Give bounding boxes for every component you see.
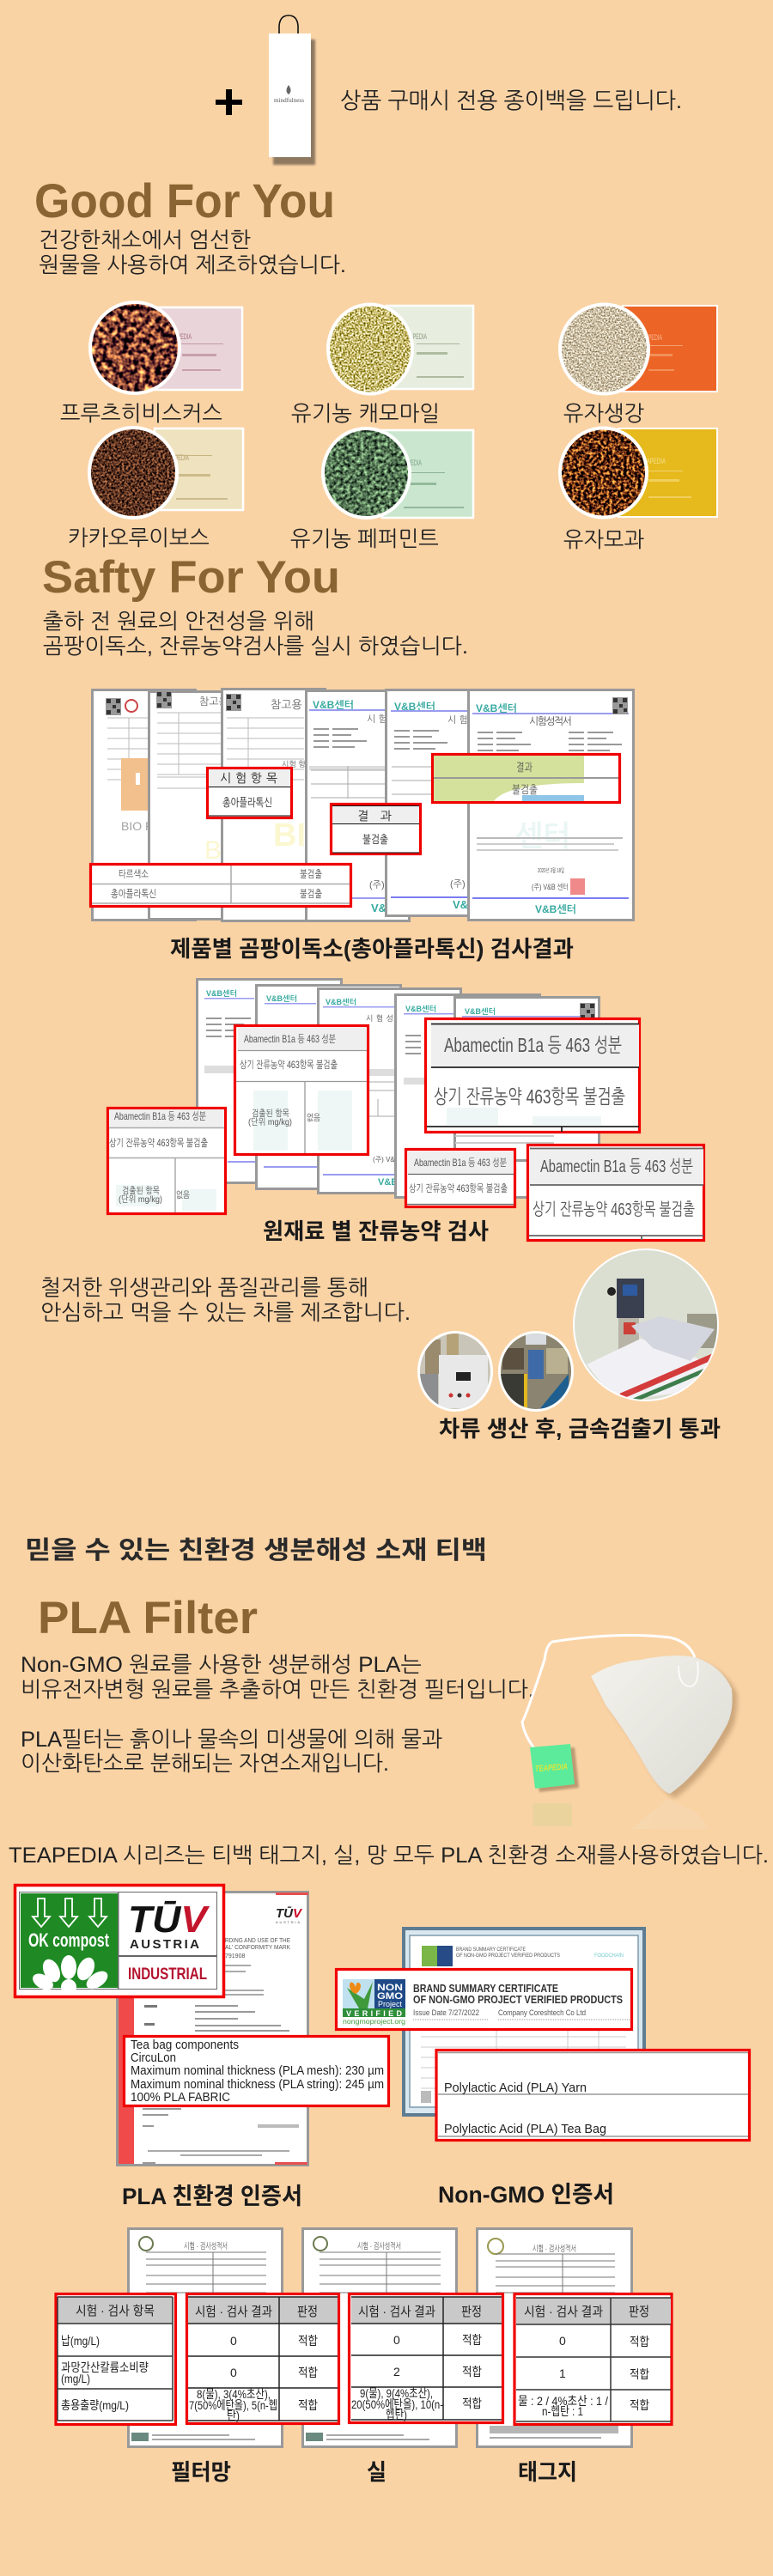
report page 2: 참고용 [199,696,228,708]
PLA description text: PLA필터는 흙이나 물속의 미생물에 의해 물과 [21,1728,442,1752]
certificate sheet: BRAND SUMMARY CERTIFICATE [456,1947,526,1953]
panel: tea 유기농 페퍼민트 [290,428,473,551]
report page 4: 시 험 [367,714,387,725]
table callout: 실 results: 적합 [462,2333,482,2347]
panel: tea 카카오루이보스: TEAPEDIA [166,453,189,462]
table callout: 태그지 results: 물 : 2 / 4%초산 : 1 / [518,2394,608,2408]
callout: PLA yarn and tea bag: Polylactic Acid (PLA) Tea Bag [444,2123,606,2136]
certificate sheet: AL' CONFORMITY MARK [225,1945,290,1951]
caption: 태그지: 태그지 [518,2459,577,2485]
heading: Safty For You: Safty For You [42,552,340,603]
table callout: 실 results: 헵탄) [386,2408,407,2421]
table callout: 필터망 results: 적합 [298,2398,318,2412]
callout: pesticide result 1: 없음 [176,1190,190,1200]
callout: OK compost TUV mark: TŪV [128,1899,210,1941]
report page 4 [306,690,409,920]
hygiene text: 철저한 위생관리와 품질관리를 통해 [40,1276,368,1300]
TEAPEDIA statement: TEAPEDIA 시리즈는 티백 태그지, 실, 망 모두 PLA 친환경 소재를사용하였습니다. [9,1844,769,1868]
caption: metal detector: 차류 생산 후, 금속검출기 통과 [439,1416,721,1442]
report page 4 [395,994,539,1197]
icon: PLA tea bag: TEAPEDIA [535,1763,568,1774]
report page 3: V&B [378,1177,398,1188]
certificate sheet: TŪV [276,1906,303,1921]
callout: 시험항목 총아플라톡신 [208,768,292,817]
report page 3 [222,689,325,920]
callout: OK compost TUV mark: AUSTRIA [130,1937,199,1952]
table callout: 필터망 results: 시험 · 검사 결과 [195,2305,272,2319]
panel: mycotoxin test reports stack [91,689,634,920]
callout: PLA yarn and tea bag: Polylactic Acid (PLA) Yarn [444,2081,587,2095]
report page 3: 참고용 시 [271,698,316,711]
callout: PLA yarn and tea bag [436,2050,749,2140]
callout: pesticide result 5 [527,1145,704,1240]
panel: test document 실: 시험 · 검사성적서 [357,2241,401,2251]
callout: pesticide result 2: Abamectin B1a 등 463 성분 [244,1033,336,1045]
callout: pesticide result 3 [426,1018,639,1132]
callout: 타르색소 총아플라톡신 불검출: 불검출 [300,868,322,880]
callout: tea bag components: 100% PLA FABRIC [131,2090,230,2105]
table callout: 태그지 results: 1 [559,2366,566,2380]
table callout: 태그지 results: 적합 [630,2335,649,2348]
certificate sheet [404,1929,644,2115]
report page 5 [386,690,490,915]
certificate sheet: RDING AND USE OF THE [225,1938,290,1944]
panel: tea 유자모과 [560,428,717,552]
callout: pesticide result 1: Abamectin B1a 등 463 성분 [114,1110,206,1122]
icon: Non-GMO verified logo: VERIFIED [346,2009,402,2018]
certificate sheet: OF NON-GMO PROJECT VERIFIED PRODUCTS [456,1953,560,1959]
report page 1 [198,979,342,1183]
panel: tea 유기농 캐모마일 [291,304,473,426]
table callout: 실 results [349,2294,503,2423]
callout: 타르색소 총아플라톡신 불검출: 총아플라톡신 [111,888,156,900]
panel: pesticide test reports stack [108,979,704,1240]
callout: brand summary certificate: BRAND SUMMARY CERTIFICATE [413,1982,558,1995]
panel: tea 유자모과: 유자모과 [563,528,644,552]
photo: metal detector [573,1249,719,1401]
callout: pesticide result 2 [235,1025,368,1154]
callout: brand summary certificate [337,1970,632,2030]
callout: pesticide result 2: 검출된 항목 [252,1109,289,1119]
callout: tea bag components [124,2037,388,2105]
table callout: 실 results: 20(50%에탄올), 10(n- [351,2397,443,2411]
report page 6: (주) V&B 센터 [532,883,569,891]
caption: Non-GMO certificate: Non-GMO 인증서 [438,2182,614,2208]
report page 5: V&B [453,898,476,911]
panel: tea 프루츠히비스커스: TEAPEDIA [168,332,192,341]
table callout: 태그지 results: 판정 [629,2305,649,2319]
report page 3 [318,989,460,1194]
callout: tea bag components: Maximum nominal thickness (PLA string): 245 µm [131,2077,384,2092]
icon: three down arrows [33,1899,107,1927]
certificate sheet: FOODCHAIN [594,1953,624,1959]
callout: OK compost TUV mark: OK compost [28,1929,109,1951]
callout: 타르색소 총아플라톡신 불검출: 타르색소 [119,868,149,880]
table callout: 태그지 results: 적합 [630,2367,649,2381]
report page 1: BIO FO [121,819,162,833]
icon: Non-GMO verified logo [343,1979,405,2026]
callout: tea bag components: Maximum nominal thickness (PLA mesh): 230 µm [131,2063,384,2078]
table callout: 필터망 results: 적합 [298,2334,318,2348]
callout: 결과 불검출: 결 과 [357,809,393,823]
callout: tea bag components: Tea bag components [131,2038,239,2052]
table callout: 실 results: 적합 [462,2365,482,2379]
callout: 결과 불검출: 불검출 [362,833,388,846]
table callout: 실 results: 시험 · 검사 결과 [358,2305,435,2319]
certificate sheet: AUSTRIA [276,1920,300,1924]
report page 6: 센터 [515,820,570,853]
callout: brand summary certificate: OF NON-GMO PROJECT VERIFIED PRODUCTS [413,1993,623,2006]
icon: Non-GMO verified logo: NON [377,1983,403,1993]
table callout: test item column: 과망간산칼륨소비량 [61,2360,149,2374]
panel: tea 유기농 페퍼민트: 유기농 페퍼민트 [290,527,439,551]
table callout: 필터망 results: 0 [230,2334,237,2348]
table callout: 필터망 results: 7(50%에탄올), 5(n-헵 [189,2398,277,2412]
report page 3: (주) V&B [373,1156,399,1163]
icon: PLA tea bag [522,1635,737,1829]
heading: eco tea bag: 믿을 수 있는 친환경 생분해성 소재 티백 [25,1536,487,1564]
report page 5: (주) V [450,879,475,890]
table callout: 필터망 results: 0 [230,2366,237,2379]
report page 6: 시험성적서 [529,715,572,727]
certificate sheet: 791908 [225,1953,245,1959]
panel: test document 필터망: 시험 · 검사성적서 [184,2241,228,2251]
callout: 시험항목 총아플라톡신: 총아플라톡신 [222,796,272,809]
panel: tea 유자생강: 유자생강 [563,402,644,426]
caption: mycotoxin results: 제품별 곰팡이독소(총아플라톡신) 검사결과 [170,936,574,962]
callout: pesticide result 2: 상기 잔류농약 463항목 불검출 [240,1059,338,1071]
report page 3: 시험 항목 [282,760,313,769]
report page 3: 시 험 성 [366,1014,393,1023]
report page 4: V&B [371,902,394,914]
callout: pesticide result 1: (단위 mg/kg) [119,1194,162,1205]
panel: tea 유자생강: TEAPEDIA [639,333,662,342]
callout: pesticide result 1 [108,1108,225,1214]
callout: 결과 불검출 green: 결과 [516,761,533,774]
icon: Non-GMO verified logo: nongmoproject.org [343,2018,405,2026]
panel: tea 카카오루이보스: 카카오루이보스 [68,526,210,550]
icon: white flower [30,1955,111,1995]
intro text: Safty For You [43,610,468,659]
report page 6: 2020년 3월 18일 [538,867,564,874]
report page 6: V&B센터 [476,702,517,714]
callout: OK compost TUV mark: INDUSTRIAL [128,1965,207,1984]
callout: 결과 불검출 green: 불검출 [512,783,538,796]
callout: 타르색소 총아플라톡신 불검출 [91,864,350,907]
intro text: Safty For You: 출하 전 원료의 안전성을 위해 [43,610,314,634]
table callout: test item column: (mg/L) [61,2372,90,2385]
table callout: test item column: 시험 · 검사 항목 [76,2304,155,2318]
PLA description text: 이산화탄소로 분해되는 자연소재입니다. [21,1752,389,1776]
caption: pesticide test: 원재료 별 잔류농약 검사 [263,1218,489,1244]
icon: paper shopping bag: mindfulness [274,96,304,104]
table callout: 필터망 results [187,2294,338,2423]
report page 3: V&B센터 [326,998,356,1006]
hygiene text [40,1276,411,1325]
report page 5: V&B센터 [465,1007,496,1016]
callout: brand summary certificate: Issue Date 7/27/2022 [413,2008,479,2017]
report page 2: V&B센터 [266,994,297,1003]
report page 1 [93,690,196,920]
table callout: 실 results: 9(물), 9(4%초산), [360,2386,433,2400]
panel: test document 실 [302,2229,457,2447]
heading: PLA Filter: PLA Filter [38,1593,258,1643]
table callout: 실 results: 0 [393,2333,400,2347]
callout: pesticide result 1: 상기 잔류농약 463항목 불검출 [109,1137,208,1149]
intro text: Good For You: 건강한채소에서 엄선한 [39,228,251,252]
table callout: 필터망 results: 판정 [297,2305,318,2319]
panel: tea 유기농 페퍼민트: TEAPEDIA [399,459,422,467]
callout: 결과 불검출 green [433,754,620,802]
certificate sheet [117,1893,308,2166]
plus sign [216,89,242,115]
report page 1: V&B센터 [206,989,237,998]
photo: production machine 2 [496,1331,575,1413]
table callout: 태그지 results: 적합 [630,2398,649,2412]
icon: Non-GMO verified logo: Project [378,2000,402,2008]
table callout: 실 results: 판정 [461,2305,482,2319]
panel: Non-GMO certificate [337,1929,749,2140]
table callout: 태그지 results: 시험 · 검사 결과 [524,2305,603,2319]
panel: tea 유자모과: TEAPEDIA [640,457,666,465]
callout: pesticide result 3: 상기 잔류농약 463항목 불검출 [434,1085,625,1108]
panel: test document 태그지: 시험 · 검사성적서 [533,2244,576,2254]
report page 2 [149,691,253,919]
intro text: Safty For You: 곰팡이독소, 잔류농약검사를 실시 하였습니다. [43,635,468,659]
callout: pesticide result 5: 상기 잔류농약 463항목 불검출 [533,1200,695,1219]
callout: pesticide result 5: Abamectin B1a 등 463 성분 [540,1157,693,1176]
table callout: 필터망 results: 탄) [227,2409,240,2422]
callout: pesticide result 3: Abamectin B1a 등 463 성분 [444,1034,622,1056]
report page 6 [469,690,634,920]
caption: PLA certificate: PLA 친환경 인증서 [122,2184,302,2209]
table callout: 태그지 results [514,2294,672,2425]
callout: 타르색소 총아플라톡신 불검출: 불검출 [300,888,322,900]
callout: pesticide result 4: Abamectin B1a 등 463 성분 [414,1157,507,1169]
icon: paper shopping bag [269,15,315,165]
panel: PLA certificate [15,1886,388,2166]
panel: test document 태그지 [478,2229,632,2447]
panel: tea 프루츠히비스커스 [60,302,242,426]
panel: tea 유기농 캐모마일: TEAPEDIA [404,332,427,341]
callout: tea bag components: CircuLon [131,2050,176,2065]
report page 4: V&B센터 [313,699,354,711]
PLA description text: 비유전자변형 원료를 추출하여 만든 친환경 필터입니다. [21,1678,534,1702]
table callout: 실 results: 적합 [462,2397,482,2410]
report page 2 [256,986,400,1188]
callout: pesticide result 2: 없음 [307,1113,320,1123]
callout: 결과 불검출 [332,804,421,854]
PLA description text: Non-GMO 원료를 사용한 생분해성 PLA는 [21,1653,422,1677]
report page 2: B [204,836,222,865]
table callout: 실 results: 2 [393,2365,400,2379]
table callout: 필터망 results: 적합 [298,2366,318,2379]
panel: test document 필터망 [129,2229,282,2447]
report page 4: (주) V [369,880,394,890]
report page 6: V&B센터 [535,903,576,915]
PLA description text [21,1653,534,1776]
report page 3: BI [273,817,306,854]
callout: 시험항목 총아플라톡신: 시 험 항 목 [220,771,277,785]
caption: 필터망: 필터망 [171,2459,231,2485]
callout: pesticide result 1: 검출된 항목 [122,1186,160,1196]
table callout: 필터망 results: 8(물), 3(4%초산), [197,2387,271,2401]
panel: tea 프루츠히비스커스: 프루츠히비스커스 [60,402,222,426]
table callout: 태그지 results: n-헵탄 : 1 [542,2404,583,2418]
photo: production machine 1 [417,1331,494,1413]
panel: tea 카카오루이보스 [68,428,243,550]
report page 4: V&B센터 [405,1005,436,1013]
intro text: Good For You: 원물을 사용하여 제조하였습니다. [39,253,346,277]
callout: OK compost TUV mark [15,1886,223,1997]
table callout: test item column: 납(mg/L) [61,2334,100,2348]
report page 5 [455,998,600,1161]
report page 5: 시 험 [447,714,468,726]
callout: pesticide result 2: (단위 mg/kg) [248,1117,292,1127]
callout: brand summary certificate: Company Coreshtech Co Ltd [498,2008,586,2017]
hygiene text: 안심하고 먹을 수 있는 차를 제조합니다. [40,1301,411,1325]
icon: Non-GMO verified logo: GMO [377,1991,403,2002]
paper bag promo text: 상품 구매시 전용 종이백을 드립니다. [340,88,682,113]
table callout: test item column: 총용출량(mg/L) [61,2398,129,2412]
intro text: Good For You [39,228,346,277]
panel: tea 유자생강 [560,304,717,426]
callout: pesticide result 4 [405,1149,515,1207]
report page 5: V&B센터 [394,701,435,713]
callout: pesticide result 4: 상기 잔류농약 463항목 불검출 [409,1182,508,1194]
caption: 실: 실 [367,2459,386,2485]
panel: tea 유기농 캐모마일: 유기농 캐모마일 [291,402,440,426]
table callout: test item column [56,2294,175,2425]
heading: Good For You: Good For You [34,173,335,228]
table callout: 태그지 results: 0 [559,2334,566,2348]
